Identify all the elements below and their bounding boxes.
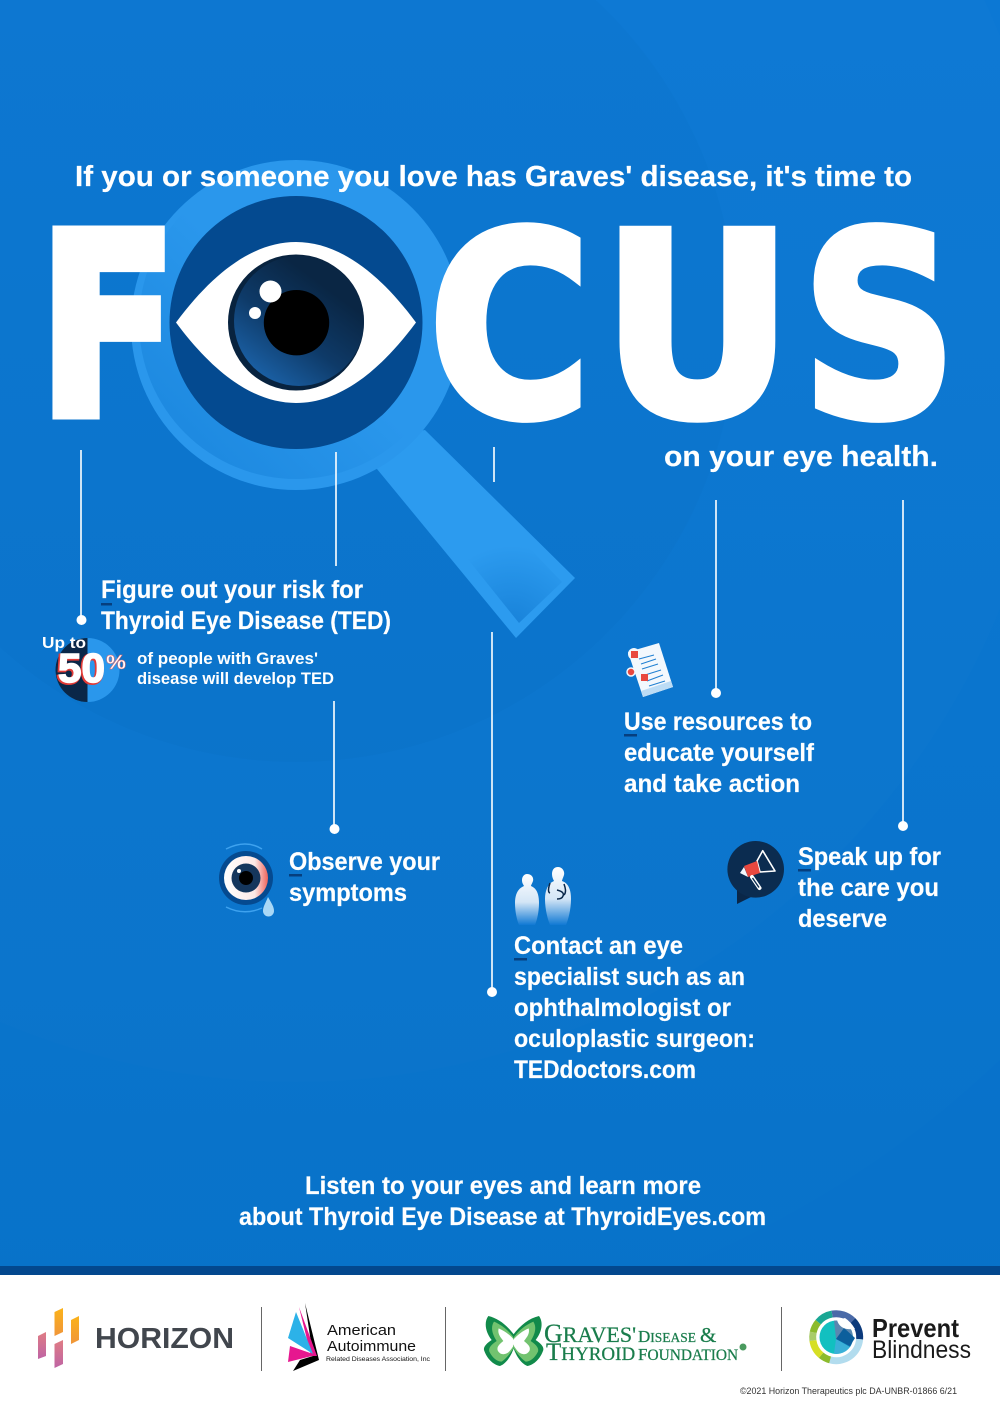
stat: 50 percent bbox=[42, 635, 334, 702]
foundation name bbox=[544, 1319, 746, 1366]
footer bbox=[0, 1266, 1000, 1411]
foundation name: FOUNDATION bbox=[638, 1345, 738, 1364]
icon: eye with tear bbox=[219, 844, 274, 916]
step: contact an eye specialist: ophthalmologist or bbox=[514, 994, 731, 1022]
icon: megaphone bbox=[727, 841, 784, 904]
logo: Graves' Disease and Thyroid Foundation bbox=[484, 1316, 746, 1366]
copyright: ©2021 Horizon Therapeutics plc DA-UNBR-01866 6/21 bbox=[740, 1386, 957, 1396]
foundation name: THYROID bbox=[546, 1339, 635, 1366]
letters CUS: U bbox=[602, 180, 793, 475]
step: contact an eye specialist bbox=[514, 867, 755, 1084]
stat description: disease will develop TED bbox=[137, 669, 334, 688]
magnifier handle bbox=[360, 430, 575, 638]
intro text: If you or someone you love has Graves' disease, it's time to bbox=[75, 161, 912, 193]
logo: Prevent Blindness: Prevent bbox=[872, 1313, 959, 1343]
highlights bbox=[260, 280, 282, 302]
step: figure out your risk: Figure out your risk for bbox=[101, 576, 363, 604]
letters CUS bbox=[429, 180, 957, 476]
foundation name: GRAVES' bbox=[544, 1319, 636, 1348]
letters CUS: S bbox=[802, 180, 957, 475]
stat description bbox=[137, 649, 334, 688]
logo: Prevent Blindness: Blindness bbox=[872, 1336, 971, 1364]
step: use resources: Use resources to bbox=[624, 708, 812, 736]
letter F: F bbox=[38, 181, 177, 473]
letters CUS: C bbox=[429, 180, 591, 476]
foundation name: DISEASE bbox=[638, 1327, 696, 1346]
up to label: Up to bbox=[42, 635, 86, 652]
logo: American Autoimmune: American bbox=[327, 1322, 396, 1339]
stat description: of people with Graves' bbox=[137, 649, 318, 668]
butterfly bbox=[484, 1316, 543, 1366]
call to action: about Thyroid Eye Disease at ThyroidEyes.com bbox=[239, 1203, 766, 1231]
step: use resources: educate yourself bbox=[624, 739, 815, 767]
logo: American Autoimmune: Autoimmune bbox=[327, 1338, 416, 1355]
step: contact an eye specialist: Contact an eye bbox=[514, 932, 683, 960]
logo: Horizon bbox=[38, 1308, 234, 1368]
call to action: Listen to your eyes and learn more bbox=[305, 1172, 701, 1200]
footer band bbox=[0, 1266, 1000, 1411]
heading: FOCUS bbox=[38, 180, 957, 476]
logo: Prevent Blindness bbox=[813, 1313, 971, 1364]
step: speak up bbox=[727, 841, 941, 933]
step: contact an eye specialist: oculoplastic surgeon: bbox=[514, 1025, 755, 1053]
iris bbox=[228, 254, 364, 390]
step: observe your symptoms bbox=[219, 844, 440, 916]
magnifier lens bbox=[170, 196, 422, 449]
logo: American Autoimmune: Related Diseases Association, Inc bbox=[326, 1357, 430, 1363]
divider lines bbox=[262, 1307, 782, 1371]
magnifier ring bbox=[131, 160, 461, 490]
50 number: % bbox=[106, 652, 126, 674]
foundation name: & bbox=[700, 1323, 716, 1347]
step: speak up: deserve bbox=[798, 905, 887, 933]
pupil bbox=[264, 290, 329, 355]
sclera bbox=[176, 242, 416, 403]
logo: Horizon: HORIZON bbox=[95, 1323, 234, 1355]
icon: checklist bbox=[627, 643, 673, 697]
eye bbox=[176, 242, 416, 403]
connector lines bbox=[76, 447, 908, 997]
50 number: 50 bbox=[57, 646, 104, 692]
icon: doctors bbox=[515, 867, 571, 925]
pie graphic bbox=[56, 638, 120, 702]
50 number bbox=[57, 645, 126, 692]
50 number: 50 bbox=[58, 645, 105, 691]
step: use resources: and take action bbox=[624, 770, 800, 798]
step: speak up: Speak up for bbox=[798, 843, 941, 871]
step: observe your symptoms: symptoms bbox=[289, 879, 407, 907]
step: observe your symptoms: Observe your bbox=[289, 848, 440, 876]
magnifying glass bbox=[131, 160, 575, 638]
step: figure out your risk bbox=[101, 576, 391, 635]
step: use resources bbox=[624, 643, 815, 798]
step: figure out your risk: Thyroid Eye Disease (TED) bbox=[101, 607, 391, 635]
step: contact an eye specialist: specialist such as an bbox=[514, 963, 745, 991]
logo: American Autoimmune bbox=[288, 1303, 430, 1371]
call to action bbox=[239, 1172, 766, 1231]
step: speak up: the care you bbox=[798, 874, 939, 902]
step: contact an eye specialist: TEDdoctors.com bbox=[514, 1056, 696, 1084]
subheading: on your eye health. bbox=[664, 441, 938, 473]
